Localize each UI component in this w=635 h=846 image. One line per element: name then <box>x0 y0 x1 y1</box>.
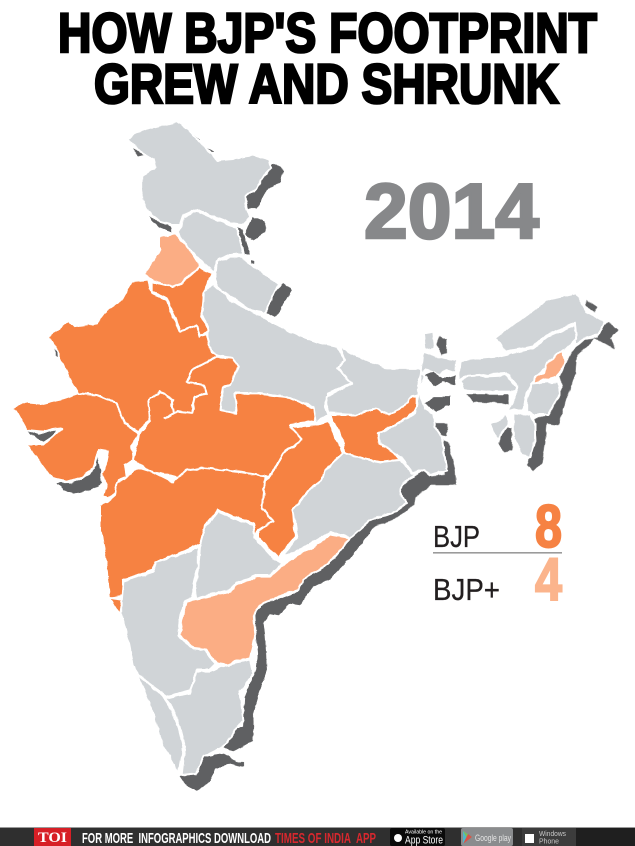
northern states: Jammu and Kashmir, Himachal, Uttarakhand <box>128 122 278 313</box>
legend row: BJP: BJP <box>433 519 480 554</box>
Uttar Pradesh <box>202 283 352 423</box>
Gujarat (BJP) <box>12 393 138 498</box>
Odisha <box>283 453 422 558</box>
Google Play badge: Google play <box>475 833 511 843</box>
legend row: BJP+: BJP+ <box>433 572 500 607</box>
App Store badge: Available on the <box>405 830 442 836</box>
Bihar, West Bengal, north-eastern states <box>327 293 605 475</box>
Maharashtra, Goa, Chhattisgarh, Jharkhand (BJP) <box>100 421 343 615</box>
map of India <box>12 122 618 790</box>
App Store badge <box>390 828 445 846</box>
Windows Phone badge: Windows <box>539 829 566 838</box>
legend row: BJP <box>433 493 562 560</box>
footer bar <box>0 827 635 846</box>
legend row: BJP+: 4 <box>535 546 563 613</box>
Karnataka, Telangana, Kerala, Tamil Nadu <box>122 512 283 775</box>
TOI logo <box>34 828 71 846</box>
legend row: BJP: 8 <box>535 493 562 560</box>
Rajasthan, Haryana, Madhya Pradesh (BJP) <box>48 267 315 478</box>
title <box>58 1 597 115</box>
TOI logo: TOI <box>38 830 67 846</box>
Nagaland (BJP+) <box>533 350 565 383</box>
Windows Phone badge <box>522 828 576 846</box>
legend: BJP 8, BJP+ 4 <box>433 493 563 613</box>
neighbouring and coastal shadow shapes <box>27 132 618 790</box>
Andhra Pradesh (BJP+) <box>180 535 350 665</box>
Bangladesh gaps <box>425 372 456 412</box>
Windows Phone badge: Phone <box>539 836 559 846</box>
Google Play badge <box>461 828 513 846</box>
legend row: BJP+ <box>433 546 563 613</box>
Punjab (BJP+) <box>143 233 200 288</box>
year label: 2014 <box>364 167 539 255</box>
